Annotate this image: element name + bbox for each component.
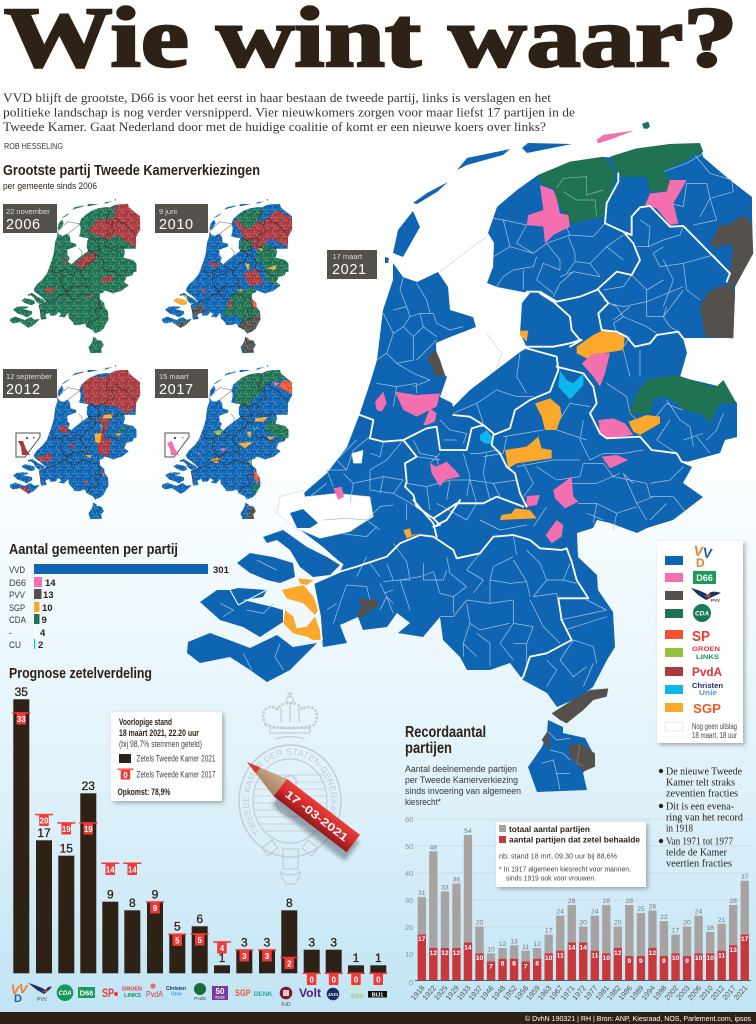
legend logo ChristenUnie: Unie xyxy=(699,690,717,697)
total value labels: 11 xyxy=(522,944,529,951)
date label 2017: 15 maart xyxy=(159,372,190,381)
logo VVD: D xyxy=(14,993,22,1005)
year labels: 1982 xyxy=(605,984,623,1002)
bar chart: gemeenten per partij: 9 xyxy=(42,615,47,626)
year labels: 2002 xyxy=(663,984,680,1002)
logo BBB: BBB xyxy=(351,993,364,1000)
year labels: 1929 xyxy=(444,984,461,1002)
total value labels: 18 xyxy=(706,925,714,932)
bar chart: gemeenten per partij: VVD xyxy=(9,565,25,575)
date label 2012 xyxy=(3,369,57,398)
logo PvdA: PvdA xyxy=(146,989,163,999)
bar chart: gemeenten per partij: 2 xyxy=(38,640,43,651)
grid and axis: 30 xyxy=(405,896,413,905)
marker numbers 2017: 9 xyxy=(153,904,158,913)
mini map 2010 xyxy=(162,199,292,354)
total value labels: 26 xyxy=(649,904,656,910)
inset: Wadden 2017 xyxy=(165,433,189,457)
seat value labels: 12 xyxy=(649,950,656,957)
logo BIJ1: BIJ1 xyxy=(372,992,383,998)
logo heart SP xyxy=(114,992,118,996)
byline: ROB HESSELING xyxy=(4,141,63,151)
legend logo D66 xyxy=(693,571,716,584)
year labels: 1918 xyxy=(409,984,427,1002)
heading: grootste partij: Grootste partij Tweede Kamerverkiezingen xyxy=(3,162,260,179)
marker numbers 2017: 33 xyxy=(17,715,26,724)
year labels: 1925 xyxy=(432,984,450,1002)
seat value labels: 10 xyxy=(706,955,714,962)
legend: voorlopige stand: 18 maart 2021, 22.20 uur xyxy=(119,728,199,739)
subtext: recordaantal: sinds invoering van algemeen xyxy=(405,786,521,796)
heading: grootste partij xyxy=(3,162,260,192)
marker numbers 2017: 2 xyxy=(287,960,292,968)
total value labels: 28 xyxy=(626,898,633,905)
legend logo SGP: SGP xyxy=(693,701,721,716)
logo Volt: Volt xyxy=(299,986,321,1000)
heading: grootste partij: per gemeente sinds 2006 xyxy=(3,181,97,192)
bullet list: Dit is een evena- xyxy=(666,802,735,812)
bar chart: gemeenten per partij: 4 xyxy=(40,628,46,639)
seat value labels: 10 xyxy=(695,955,702,962)
legend logo GroenLinks: GROEN xyxy=(692,646,720,653)
IJsselmeer dijk lines xyxy=(440,235,502,368)
total value labels: 20 xyxy=(579,920,587,926)
total value labels: 28 xyxy=(603,898,610,905)
total value labels: 33 xyxy=(441,884,449,892)
seat numbers 2021: 9 xyxy=(107,888,114,902)
total value labels: 17 xyxy=(672,928,679,934)
legend logo GroenLinks: LINKS xyxy=(696,654,720,661)
grid and axis: 60 xyxy=(405,815,413,824)
seat value labels: 14 xyxy=(568,944,576,952)
legend logo VVD xyxy=(693,542,714,570)
year labels: 1986 xyxy=(616,984,634,1002)
logo DENK: DENK xyxy=(254,991,273,998)
legend logo VVD: V xyxy=(693,542,705,560)
date label 2021: 17 maart xyxy=(332,252,363,261)
legend: voorlopige stand: Zetels Tweede Kamer 2021 xyxy=(136,754,216,764)
legend: voorlopige stand: Zetels Tweede Kamer 2017 xyxy=(136,770,216,780)
heading: aantal gemeenten: Aantal gemeenten per partij xyxy=(9,541,178,558)
total value labels: 36 xyxy=(453,876,460,884)
bullet list: Van 1971 tot 1977 xyxy=(666,836,733,848)
bar chart: gemeenten per partij: PVV xyxy=(9,590,25,600)
logo VVD: V xyxy=(9,981,21,998)
legend note: 18 maart, 18 uur xyxy=(692,731,737,740)
marker numbers 2017: 5 xyxy=(197,936,202,945)
year labels: 1937 xyxy=(467,984,484,1002)
marker numbers 2017: 20 xyxy=(40,816,49,826)
subtext: recordaantal: per Tweede Kamerverkiezing xyxy=(405,775,518,785)
date label 2010: 2010 xyxy=(159,217,194,233)
seat value labels: 12 xyxy=(441,950,449,957)
grid and axis: 10 xyxy=(405,950,413,959)
logo PvdD xyxy=(194,983,206,1002)
bar chart: gemeenten per partij: CU xyxy=(9,640,21,650)
legend logo CDA xyxy=(693,604,711,622)
seat value labels: 9 xyxy=(639,958,643,965)
seat numbers 2021: 3 xyxy=(241,936,248,950)
total value labels: 28 xyxy=(729,898,737,905)
year labels: 2010 xyxy=(697,984,715,1002)
total value labels: 22 xyxy=(660,914,668,921)
grid and axis: 0 xyxy=(409,978,413,987)
seat value labels: 12 xyxy=(430,950,437,957)
bar chart: gemeenten per partij: CDA xyxy=(9,615,26,625)
pencil with date xyxy=(235,753,363,861)
date label 2012: 12 september xyxy=(6,372,52,381)
seat numbers 2021: 1 xyxy=(219,951,226,965)
seat value labels: 14 xyxy=(579,944,587,952)
seat numbers 2021: 1 xyxy=(375,951,382,965)
legend logo VVD: V xyxy=(702,544,714,562)
party colours on main map south xyxy=(230,520,608,772)
intro text xyxy=(3,90,575,134)
marker numbers 2017: 5 xyxy=(175,936,180,946)
inset: Wadden 2012 xyxy=(16,433,40,457)
seat value labels: 12 xyxy=(614,950,622,957)
logo D66: D66 xyxy=(80,988,93,998)
marker numbers 2017: 0 xyxy=(376,976,381,984)
logo ChristenUnie: Christen xyxy=(166,986,186,992)
date label 2006 xyxy=(3,204,57,233)
logo JA21: JA21 xyxy=(328,992,339,997)
heading: prognose: Prognose zetelverdeling xyxy=(9,665,152,682)
bar chart: prognose zetelverdeling xyxy=(12,685,387,985)
total bars xyxy=(418,835,749,980)
total value labels: 20 xyxy=(614,920,622,926)
date label 2012: 2012 xyxy=(6,382,41,398)
legend note: Nog geen uitslag xyxy=(692,722,737,731)
seat numbers 2021: 1 xyxy=(353,951,360,965)
legend logo SP: SP xyxy=(692,628,710,645)
total value labels: 10 xyxy=(487,946,495,954)
bar chart: gemeenten per partij: 13 xyxy=(43,590,54,601)
legend logo PVV: PVV xyxy=(711,598,720,603)
bar chart: gemeenten per partij: 10 xyxy=(42,603,53,614)
year labels: 1933 xyxy=(455,984,473,1002)
party colours on main map north xyxy=(333,122,753,520)
seat numbers 2021: 15 xyxy=(60,842,73,856)
year labels: 1971 xyxy=(559,984,576,1002)
date label 2006: 2006 xyxy=(6,217,41,233)
seat value labels: 11 xyxy=(591,952,599,960)
marker numbers 2017: 0 xyxy=(331,976,336,984)
seat value labels: 9 xyxy=(627,958,631,965)
total value labels: 25 xyxy=(637,906,645,913)
seal of the Tweede Kamer: TWEEDE KAMER DER STATEN-GENERAAL xyxy=(242,748,337,836)
bullet list: in 1918 xyxy=(666,824,693,834)
total value labels: 54 xyxy=(464,828,472,835)
year labels: 1989 xyxy=(628,984,646,1002)
logo 50PLUS xyxy=(212,986,228,1000)
bar chart: gemeenten per partij: 301 xyxy=(213,565,230,576)
date label 2017 xyxy=(155,369,208,398)
total value labels: 20 xyxy=(476,920,483,926)
year labels: 1922 xyxy=(420,984,438,1002)
bullet list: ring van het record xyxy=(666,812,743,824)
date label 2017: 2017 xyxy=(159,382,194,398)
subtext: recordaantal: kiesrecht* xyxy=(405,797,441,807)
year labels: 1952 xyxy=(501,984,519,1002)
bullet list: De nieuwe Tweede xyxy=(666,766,742,778)
logo D66 xyxy=(78,987,95,998)
marker numbers 2017: 0 xyxy=(309,976,314,984)
legend note xyxy=(692,722,737,740)
seat numbers 2021: 8 xyxy=(129,896,136,910)
bullet list xyxy=(659,766,743,870)
heading: recordaantal partijen: Recordaantal xyxy=(405,724,486,741)
mini map 2017 xyxy=(162,365,292,520)
seat value labels: 10 xyxy=(672,955,679,962)
year labels: 1972 xyxy=(570,984,588,1002)
legend logo VVD: D xyxy=(696,556,705,570)
year labels: 2006 xyxy=(686,984,703,1002)
bar chart: gemeenten per partij: 14 xyxy=(45,578,56,589)
total value labels: 24 xyxy=(556,908,564,916)
logo GroenLinks: LINKS xyxy=(124,993,141,999)
legend: voorlopige stand: (bij 98,7% stemmen geteld) xyxy=(119,739,202,749)
logo JA21 xyxy=(327,988,339,1000)
intro text: politieke landschap is nog verder versnipperd. Vier nieuwkomers zorgen voor maar liefst 17 partijen in de xyxy=(3,104,575,120)
year labels: 1977 xyxy=(582,984,600,1002)
year labels: 2021 xyxy=(732,984,749,1002)
seat value labels: 7 xyxy=(489,964,493,970)
logo PVV xyxy=(28,983,52,1003)
seat numbers 2021: 6 xyxy=(196,912,203,926)
year labels: 1981 xyxy=(593,984,611,1002)
white municipalities without result xyxy=(277,490,373,538)
legend: totaal aantal partijen: aantal partijen dat zetel behaalde xyxy=(509,834,640,844)
seat value labels: 11 xyxy=(557,952,564,960)
seat value labels xyxy=(418,936,749,970)
heading: recordaantal partijen xyxy=(405,724,486,757)
logo SP: SP xyxy=(102,988,114,1000)
heading: recordaantal partijen: partijen xyxy=(405,740,452,757)
seal of the Tweede Kamer xyxy=(238,691,342,885)
logo GroenLinks xyxy=(122,986,142,999)
seat value labels: 10 xyxy=(476,955,483,962)
subtext: recordaantal xyxy=(405,764,521,807)
total value labels: 24 xyxy=(695,908,702,916)
seat value labels: 8 xyxy=(512,960,516,968)
seat value labels: 14 xyxy=(464,944,472,952)
markers 2017 xyxy=(12,712,387,985)
date label 2010: 9 juni xyxy=(159,207,177,216)
intro text: VVD blijft de grootste, D66 is voor het eerst in haar bestaan de tweede partij, links is verslagen en het xyxy=(3,90,551,105)
year labels: 1948 xyxy=(490,984,507,1002)
footer bar xyxy=(0,1012,756,1024)
legend logo ChristenUnie xyxy=(692,683,723,697)
logo VVD xyxy=(9,981,29,1005)
seat numbers 2021: 3 xyxy=(330,936,337,950)
bullet list: Kamer telt straks xyxy=(666,778,735,788)
seat numbers 2021: 3 xyxy=(264,936,271,950)
logo BBB xyxy=(347,985,364,1000)
stacked bar chart: partijen per verkiezing xyxy=(405,815,751,1002)
seat value labels: 9 xyxy=(685,958,689,965)
seat value labels: 10 xyxy=(603,955,610,962)
legend logo PvdA: PvdA xyxy=(692,665,722,679)
logo BIJ1 xyxy=(368,991,387,998)
seat value labels: 10 xyxy=(545,955,553,962)
logo FvD xyxy=(280,987,292,1008)
bar chart: gemeenten per partij: SGP xyxy=(9,603,25,613)
marker numbers 2017: 14 xyxy=(128,866,137,874)
date label 2021 xyxy=(327,250,377,279)
legend: totaal aantal partijen xyxy=(496,822,648,889)
total value labels: 24 xyxy=(591,908,599,916)
logo FvD: FvD xyxy=(281,1002,291,1008)
grid and axis: 20 xyxy=(405,923,413,932)
year labels: 1956 xyxy=(513,984,530,1002)
seat numbers 2021: 17 xyxy=(37,826,51,840)
legend: totaal aantal partijen: * In 1917 algemeen kiesrecht voor mannen, xyxy=(499,866,631,874)
patch blue voorne xyxy=(290,509,318,528)
total value labels: 12 xyxy=(499,941,506,948)
seat bars xyxy=(418,935,749,980)
total value labels: 17 xyxy=(545,928,553,934)
logo GroenLinks: GROEN xyxy=(122,986,142,992)
total value labels: 31 xyxy=(418,890,426,897)
year labels: 1994 xyxy=(640,984,657,1002)
logo PvdD: PvdD xyxy=(194,996,206,1002)
subtext: recordaantal: Aantal deelnemende partijen xyxy=(405,764,517,774)
bullet list: veertien fracties xyxy=(666,858,732,870)
year labels: 1946 xyxy=(478,984,496,1002)
year labels: 1963 xyxy=(536,984,553,1002)
bar chart: gemeenten per partij xyxy=(9,564,230,651)
total value labels: 21 xyxy=(718,917,726,924)
seat value labels: 11 xyxy=(718,952,725,960)
map legend xyxy=(657,541,745,745)
logo PvdA xyxy=(146,983,163,999)
seat value labels: 17 xyxy=(418,936,426,943)
legend logo GroenLinks xyxy=(692,646,720,661)
logo 50PLUS: PLUS xyxy=(215,996,225,1000)
marker numbers 2017: 3 xyxy=(242,952,247,961)
legend: totaal aantal partijen: nb: stand 18 mrt, 09.30 uur bij 88,6% xyxy=(499,854,617,860)
bar chart: gemeenten per partij: D66 xyxy=(9,578,26,588)
date label 2010 xyxy=(155,204,208,233)
seat numbers 2021: 5 xyxy=(174,920,181,934)
seat value labels: 9 xyxy=(662,958,666,965)
logo SGP: SGP xyxy=(235,988,250,998)
total value labels xyxy=(418,828,749,954)
year labels: 1967 xyxy=(547,984,565,1002)
logo ChristenUnie xyxy=(166,986,186,998)
logo PVV: PVV xyxy=(37,997,48,1003)
marker numbers 2017 xyxy=(17,715,381,984)
date label 2021: 2021 xyxy=(332,262,367,278)
seat numbers 2021: 8 xyxy=(286,896,293,910)
seat numbers 2021 xyxy=(15,685,382,965)
logo VVD: V xyxy=(17,981,29,997)
year labels: 2017 xyxy=(720,984,738,1002)
intro text: Tweede Kamer. Gaat Nederland door met de huidige coalitie of komt er een nieuwe koers over links? xyxy=(3,119,546,134)
logo ChristenUnie: Unie xyxy=(171,992,182,998)
mini map 2006 xyxy=(10,199,140,354)
legend logo ChristenUnie: Christen xyxy=(692,683,723,690)
marker numbers 2017: 0 xyxy=(354,976,359,984)
bullet list: telde de Kamer xyxy=(666,848,728,858)
grid and axis: 40 xyxy=(405,869,413,878)
mini map 2012 xyxy=(10,365,140,520)
marker numbers 2017: 3 xyxy=(265,952,270,961)
total value labels: 28 xyxy=(568,898,576,905)
grid and axis: 50 xyxy=(405,842,413,851)
seat numbers 2021: 35 xyxy=(15,685,28,699)
year labels: 2003 xyxy=(674,984,692,1002)
seat value labels: 8 xyxy=(501,960,505,968)
logo CDA: CDA xyxy=(58,991,72,997)
date label 2006: 22 november xyxy=(6,207,50,216)
year labels: 2012 xyxy=(709,984,726,1002)
marker numbers 2017: 19 xyxy=(84,825,93,834)
legend: totaal aantal partijen: totaal aantal partijen xyxy=(509,824,590,834)
legend logo CDA: CDA xyxy=(695,610,709,618)
marker numbers 2017: 19 xyxy=(62,825,71,834)
seat numbers 2021: 3 xyxy=(308,936,315,950)
seat value labels: 12 xyxy=(453,950,460,957)
total value labels: 37 xyxy=(741,874,749,881)
total value labels: 13 xyxy=(510,938,518,946)
bullet list: zeventien fracties xyxy=(666,788,738,800)
seat value labels: 8 xyxy=(535,960,539,968)
pencil with date: 17 -03-2021 xyxy=(282,788,350,844)
legend logo D66: D66 xyxy=(696,573,713,583)
grid and axis xyxy=(405,815,750,987)
seat value labels: 7 xyxy=(524,964,528,970)
total value labels: 20 xyxy=(683,920,691,926)
party logos row xyxy=(9,981,387,1008)
seat numbers 2021: 9 xyxy=(152,888,159,902)
legend: voorlopige stand: Voorlopige stand xyxy=(119,717,172,728)
legend: totaal aantal partijen: sinds 1919 ook voor vrouwen. xyxy=(506,876,596,882)
logo 50PLUS: 50 xyxy=(216,987,225,996)
legend: voorlopige stand: Opkomst: 78,9% xyxy=(118,787,171,798)
legend logo PVV xyxy=(691,588,721,603)
marker numbers 2017: 14 xyxy=(106,866,115,874)
legend: voorlopige stand xyxy=(111,712,224,803)
seat numbers 2021: 23 xyxy=(82,779,95,793)
legend: voorlopige stand: 0 xyxy=(123,771,128,780)
seat value labels: 13 xyxy=(729,947,737,954)
total value labels: 48 xyxy=(430,844,437,852)
year labels: 1998 xyxy=(651,984,669,1002)
year labels: 1959 xyxy=(524,984,542,1002)
marker numbers 2017: 4 xyxy=(220,944,225,953)
logo CDA xyxy=(57,984,73,1001)
total value labels: 12 xyxy=(533,941,541,948)
bar chart: gemeenten per partij: - xyxy=(9,628,12,638)
main map 2021 xyxy=(187,122,753,792)
seat value labels: 17 xyxy=(741,936,749,943)
year labels xyxy=(409,984,749,1002)
